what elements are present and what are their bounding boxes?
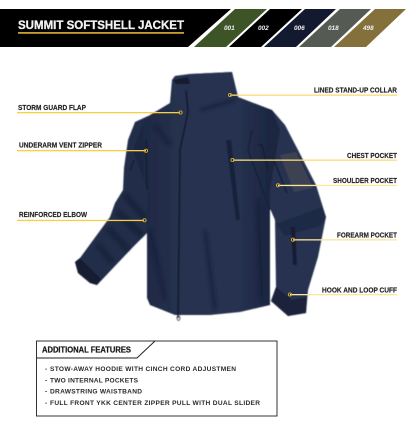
feature list: - (45, 388, 47, 396)
callout: lined stand-up collar (228, 86, 397, 97)
callout: underarm vent zipper: UNDERARM VENT ZIPPER (19, 140, 103, 150)
callout: chest pocket: CHEST POCKET (347, 151, 397, 160)
colour swatches: 498 (362, 25, 374, 32)
feature list (45, 366, 260, 407)
shoulder velcro patch (280, 152, 313, 192)
jacket left sleeve (75, 116, 148, 285)
feature list: - (45, 400, 47, 407)
panel: additional features (36, 341, 277, 416)
jacket body (133, 72, 280, 315)
colour swatches (194, 9, 406, 47)
callout: forearm pocket (291, 230, 397, 241)
colour swatches: 001 (224, 25, 235, 32)
jacket illustration (75, 72, 326, 320)
tab divider (36, 341, 155, 358)
callout: chest pocket (231, 151, 397, 162)
callout: forearm pocket: FOREARM POCKET (337, 230, 397, 240)
header banner (0, 9, 231, 47)
colour swatches: 002 (258, 25, 269, 32)
feature list: STOW-AWAY HOODIE WITH CINCH CORD ADJUSTMEN (50, 366, 236, 373)
feature list: DRAWSTRING WAISTBAND (50, 388, 142, 396)
chest pocket zipper (226, 140, 240, 220)
title: SUMMIT SOFTSHELL JACKET (18, 18, 185, 32)
jacket right sleeve (262, 108, 326, 316)
panel heading: ADDITIONAL FEATURES (42, 346, 132, 354)
feature list: - (45, 378, 47, 384)
colour swatches: 018 (328, 25, 339, 32)
callout: shoulder pocket: SHOULDER POCKET (333, 176, 397, 185)
callout: reinforced elbow (17, 210, 146, 222)
forearm pocket (291, 227, 297, 265)
underarm vent (130, 140, 147, 190)
shoulder pocket zipper (273, 158, 287, 193)
callout: shoulder pocket (276, 176, 397, 187)
centre zipper (178, 90, 188, 318)
arm seam (248, 130, 270, 210)
colour swatches: 006 (294, 25, 305, 32)
callout: lined stand-up collar: LINED STAND-UP COLLAR (314, 86, 397, 94)
feature list: TWO INTERNAL POCKETS (50, 378, 139, 384)
callout: hook and loop cuff (288, 286, 397, 296)
callout: hook and loop cuff: HOOK AND LOOP CUFF (322, 286, 397, 294)
callout: underarm vent zipper (17, 140, 148, 152)
feature list: FULL FRONT YKK CENTER ZIPPER PULL WITH DUAL SLIDER (50, 400, 260, 407)
feature list: - (45, 366, 47, 373)
callout: reinforced elbow: REINFORCED ELBOW (19, 210, 88, 219)
callout: storm guard flap (17, 103, 182, 114)
callout: storm guard flap: STORM GUARD FLAP (18, 103, 86, 112)
